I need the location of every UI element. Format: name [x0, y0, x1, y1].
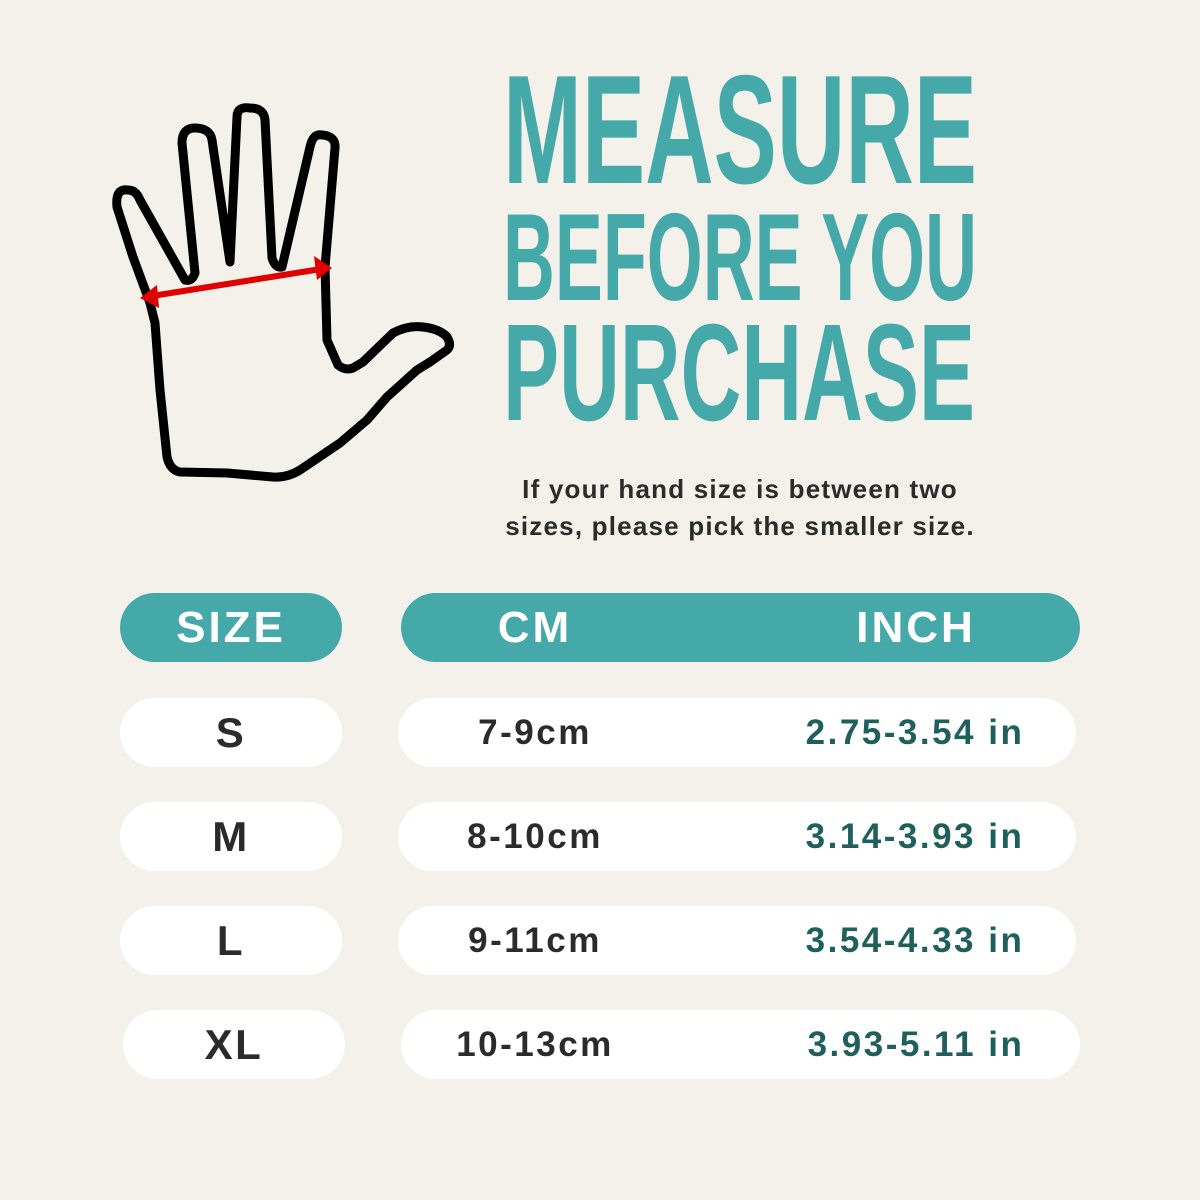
row: M: M: [212, 812, 250, 860]
row: XL: 3.93-5.11 in: [808, 1024, 1024, 1064]
subtitle: [505, 474, 975, 541]
title: [503, 43, 977, 440]
row: L: 3.54-4.33 in: [806, 920, 1024, 960]
header: size: [120, 593, 342, 662]
row: S: 7-9cm: [478, 712, 592, 752]
row: M: 3.14-3.93 in: [806, 816, 1024, 856]
row: S: 2.75-3.54 in: [806, 712, 1024, 752]
row: S: S: [216, 708, 246, 756]
row: XL: [123, 1010, 1080, 1079]
row: M: [120, 802, 1076, 871]
row: M: 8-10cm: [467, 816, 603, 856]
row: XL: 10-13cm: [456, 1024, 614, 1064]
subtitle: sizes, please pick the smaller size.: [505, 511, 975, 541]
row: L: L: [217, 916, 245, 964]
row: S: [120, 698, 1076, 767]
subtitle: If your hand size is between two: [522, 474, 958, 504]
row: XL: XL: [205, 1020, 263, 1068]
header: cm / inch: CM: [498, 602, 572, 652]
icon: hand with measurement arrow: [112, 103, 454, 482]
header: cm / inch: INCH: [856, 602, 976, 652]
row: L: 9-11cm: [468, 920, 602, 960]
row: L: [120, 906, 1076, 975]
header: size: SIZE: [176, 602, 286, 652]
header: cm / inch: [401, 593, 1080, 662]
